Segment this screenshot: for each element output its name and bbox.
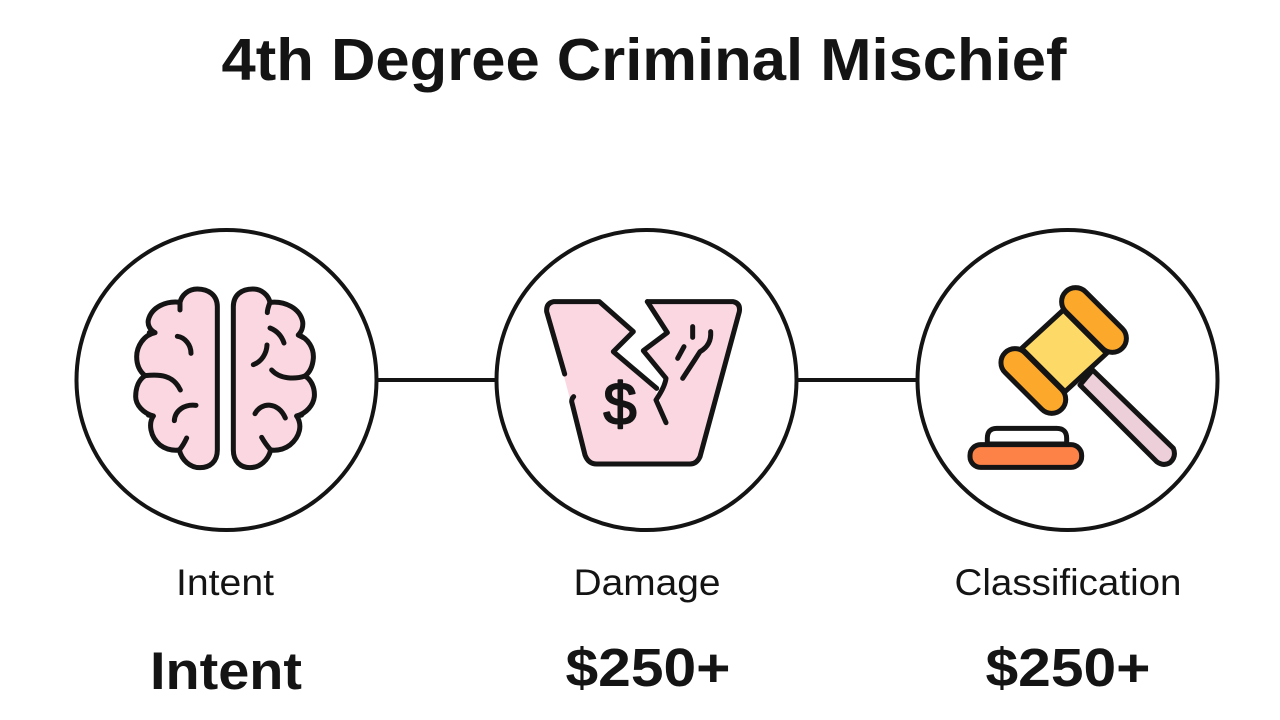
connector: damage to classification [798, 378, 917, 382]
icon: cracked wall with dollar sign [547, 302, 740, 464]
label: intent: Intent [176, 562, 275, 603]
value: intent: Intent [150, 642, 302, 701]
connector: intent to damage [378, 378, 496, 382]
title: 4th Degree Criminal Mischief [222, 27, 1067, 93]
value: damage threshold: $250+ [566, 638, 730, 698]
icon detail: dollar sign: $ [603, 370, 636, 437]
value: classification threshold: $250+ [986, 638, 1150, 698]
label: classification: Classification [954, 562, 1182, 603]
circle: intent [76, 230, 376, 530]
icon: gavel [970, 282, 1174, 467]
circle: classification [918, 230, 1218, 530]
icon: brain [136, 289, 314, 468]
circle: damage [496, 230, 796, 530]
label: damage: Damage [574, 562, 720, 603]
